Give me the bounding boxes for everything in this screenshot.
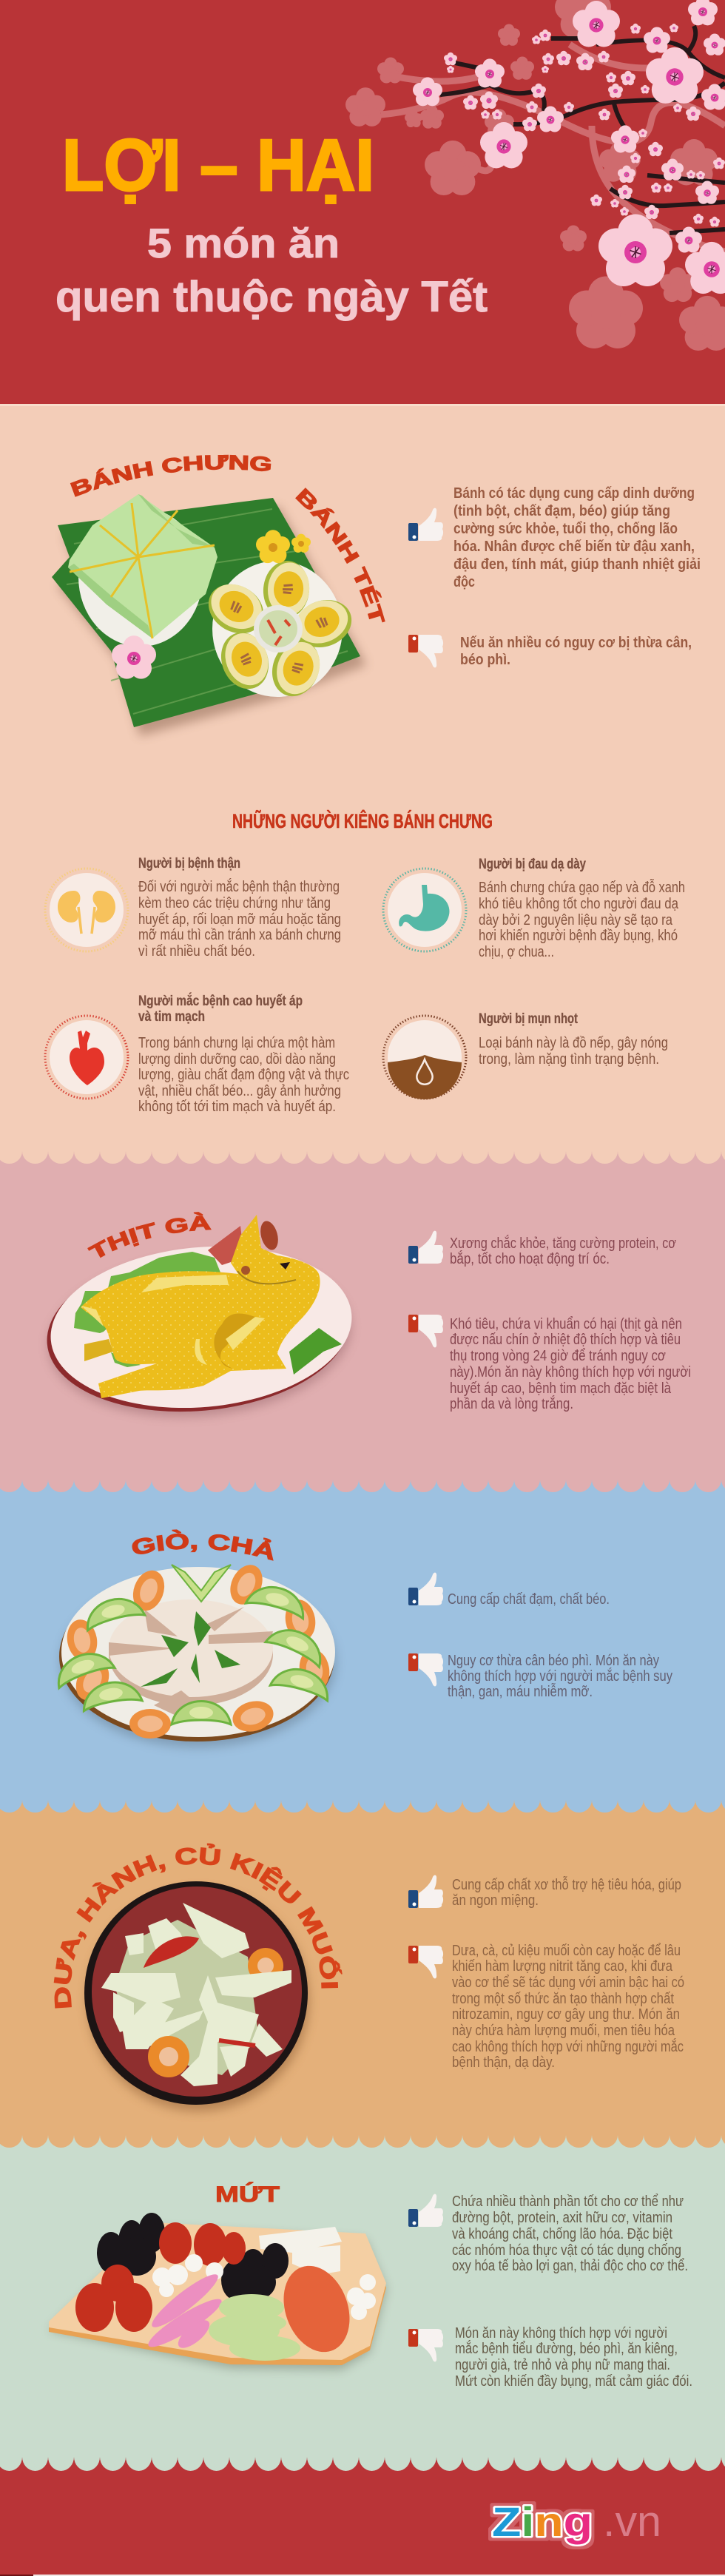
card: người bị bệnh thận [45,856,341,960]
icon: thumb up [408,1231,443,1264]
text block: benefits [450,1235,676,1267]
card: người bị mụn nhọt [383,1011,668,1099]
text block: harms: Món ăn này không thích hợp với người [455,2325,667,2341]
illustration: pickles on plate [84,1881,309,2111]
card title: Người bị bệnh thận [138,856,240,871]
benefit: pros [408,1231,676,1267]
text block: benefits [452,2194,688,2274]
text block: benefits: hóa. Nhân được chế biến từ đậu xanh, [453,539,695,555]
text block: harms: này chứa hàm lượng muối, men tiêu hóa [452,2023,675,2039]
card text: mỡ máu thì cần tránh xa bánh chưng [138,927,341,943]
text block: harms: mắc bệnh tiểu đường, béo phì, ăn kiêng, [455,2340,678,2357]
text block: benefits: đường bột, protein, axit hữu cơ, vitamin [452,2210,672,2226]
panel: header [55,0,725,351]
icon: kidneys [45,869,128,951]
text block: harms: được nấu chín ở nhiệt độ thích hợp và tiêu [450,1332,681,1348]
text block: harms: Dưa, cà, củ kiệu muối còn cay hoặc để lâu [452,1943,681,1959]
text block: benefits: và khoáng chất, chống lão hóa. Đặc biệt [452,2226,672,2242]
text block: harms: khiến hàm lượng nitrit tăng cao, khi đưa [452,1958,673,1975]
text block: harms: Khó tiêu, chứa vi khuẩn có hại (thịt gà nên [450,1316,682,1332]
card text [479,879,685,960]
card text: dày bởi 2 nguyên liệu này sẽ tạo ra [479,912,673,928]
icon: acne drop [383,1016,466,1099]
text block: harms: thụ trong vòng 24 giờ để tránh nguy cơ [450,1348,666,1364]
benefit: pros [408,1875,681,1909]
icon: thumb down [408,1315,443,1347]
text block: benefits: cường sức khỏe, tuổi thọ, chống lão [453,521,678,537]
heading: giò, chả: GIÒ, CHẢ [132,1529,274,1561]
card text [479,1035,668,1068]
card text: không tốt tới tim mạch và huyết áp. [138,1099,336,1115]
card text: chịu, ợ chua... [479,944,554,960]
icon: thumb down [408,635,443,667]
text block: harms: người già, trẻ nhỏ và phụ nữ mang thai. [455,2357,670,2373]
card text: Trong bánh chưng lại chứa một hàm [138,1035,335,1051]
text block: harms: béo phì. [460,652,510,668]
benefit: pros [408,1573,610,1608]
card text: lượng, giàu chất đạm động vật và thực [138,1067,349,1083]
text block: harms: trong một số thức ăn tạo thành hợp chất [452,1991,674,2007]
card title: và tim mạch [138,1009,205,1025]
icon: heart [45,1016,128,1099]
icon: thumb up [408,1875,443,1908]
card text [138,1035,349,1115]
harm: cons [408,1943,684,2071]
text block: harms: nitrozamin, nguy cơ gây ung thư. Món ăn [452,2006,680,2023]
text block: harms: thận, gan, máu nhiễm mỡ. [448,1683,593,1700]
card text: Đối với người mắc bệnh thận thường [138,878,340,895]
text block: harms [455,2325,692,2390]
card text [138,878,341,960]
card text: vật, nhiều chất béo... gây ảnh hưởng [138,1083,341,1099]
card title [138,993,303,1025]
card text: Loại bánh này là đồ nếp, gây nóng [479,1035,668,1051]
card text: Bánh chưng chứa gạo nếp và đỗ xanh [479,879,685,896]
illustration: cherry blossom branch [345,0,725,351]
icon: thumb up [408,2194,443,2227]
harm: cons [408,2325,692,2390]
card text: kèm theo các triệu chứng như tăng [138,895,331,911]
heading: bánh chưng: BÁNH CHƯNG [70,454,271,497]
card title: Người mắc bệnh cao huyết áp [138,993,303,1009]
text block: benefits: đậu đen, tính mát, giúp thanh nhiệt giải [453,556,701,573]
text block: harms: Nguy cơ thừa cân béo phì. Món ăn này [448,1653,659,1669]
panel: mứt [49,2182,692,2390]
footer logo: Zing.vn [492,2498,661,2546]
text block: harms [448,1653,672,1700]
heading: bánh tét: BÁNH TÉT [295,488,385,623]
footer logo: Zing.vn: Zing [492,2498,593,2545]
text block: benefits [453,485,701,590]
text block: harms [460,635,692,668]
icon: stomach [383,869,466,951]
text block: harms: bệnh thận, dạ dày. [452,2054,555,2071]
text block: harms [450,1316,691,1412]
card: người mắc bệnh cao huyết áp và tim mạch [45,993,349,1115]
harm: cons [408,1653,672,1700]
illustration: bánh chưng and bánh tét on banana leaf [52,494,366,736]
subtitle line 2: quen thuộc ngày Tết [55,273,488,321]
text block: harms [452,1943,684,2071]
text block: benefits: Chứa nhiều thành phần tốt cho cơ thể như [452,2194,684,2210]
text block: benefits: bắp, tốt cho hoạt động trí óc. [450,1250,610,1267]
title: LỢI – HẠI [62,124,374,206]
text block: benefits: Cung cấp chất đạm, chất béo. [448,1591,610,1608]
card text: hơi khiến người bệnh đầy bụng, khó [479,928,678,944]
subtitle line 1: 5 món ăn [147,220,340,266]
benefit: pros [408,485,701,590]
text block: benefits: Xương chắc khỏe, tăng cường protein, cơ [450,1235,676,1252]
illustration: candied fruit board [49,2213,386,2370]
card text: trong, làm nặng tình trạng bệnh. [479,1051,659,1068]
heading: mứt: MỨT [215,2182,280,2207]
panel: thịt gà [44,1212,691,1420]
text block: benefits [452,1876,681,1909]
illustration: sliced sausage plate [51,1560,336,1747]
heading: những người kiêng bánh chưng: NHỮNG NGƯỜI KIÊNG BÁNH CHƯNG [232,809,493,832]
icon: thumb up [408,1573,443,1605]
card: người bị đau dạ dày [383,857,685,960]
text block: harms: phần da và lòng trắng. [450,1395,573,1412]
icon: thumb down [408,1946,443,1978]
text block: benefits: các nhóm hóa thực vật có tác dụng chống [452,2242,681,2259]
text block: harms: Nếu ăn nhiều có nguy cơ bị thừa cân, [460,635,692,651]
card title: Người bị mụn nhọt [479,1011,579,1027]
illustration: boiled chicken on plate [40,1215,359,1429]
panel: dưa, hành, củ kiệu muối [53,1844,684,2116]
text block: harms: không thích hợp với người mắc bệnh suy [448,1668,672,1685]
card text: khó tiêu không tốt cho người đau dạ [479,896,679,912]
heading: thịt gà: THỊT GÀ [87,1212,212,1258]
icon: thumb down [408,2329,443,2361]
benefit: pros [408,2194,688,2274]
card text: huyết áp, rối loạn mỡ máu hoặc tăng [138,911,341,928]
footer logo: Zing.vn: .vn [603,2498,661,2546]
heading: dưa, hành, củ kiệu muối: DƯA, HÀNH, CỦ KIỆU MUỐI [53,1844,343,2009]
card text: vì rất nhiều chất béo. [138,943,255,960]
text block: harms: huyết áp cao, bệnh tim mạch đặc biệt là [450,1380,672,1397]
harm: cons [408,635,692,668]
panel: bánh chưng, bánh tét [44,454,701,1115]
panel: giò, chả [56,1529,672,1752]
text block: benefits: (tinh bột, chất đạm, béo) giúp tăng [453,503,670,519]
icon: thumb up [408,508,443,541]
icon: thumb down [408,1653,443,1686]
text block: benefits: ăn ngon miệng. [452,1892,539,1909]
card text: lượng dinh dưỡng cao, dồi dào năng [138,1051,336,1068]
harm: cons [408,1315,691,1412]
text block: benefits: độc [453,574,475,590]
text block: benefits: Cung cấp chất xơ thỗ trợ hệ tiêu hóa, giúp [452,1876,681,1893]
card title: Người bị đau dạ dày [479,857,586,872]
